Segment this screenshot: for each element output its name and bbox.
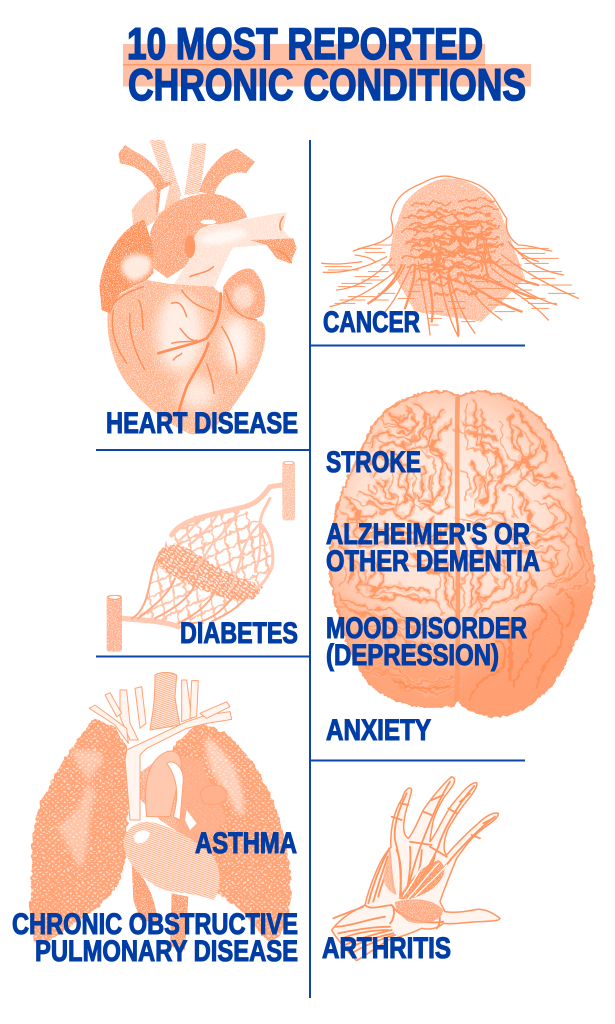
label: stroke: STROKE xyxy=(326,446,421,479)
label: diabetes: DIABETES xyxy=(180,617,298,650)
label: mood disorder (depression): MOOD DISORDER xyxy=(326,612,527,645)
lungs light lobes xyxy=(57,737,244,868)
tumor strands xyxy=(368,258,538,335)
title highlight bars xyxy=(123,44,531,86)
hand outline xyxy=(332,777,500,961)
capillary tube right xyxy=(282,461,295,520)
hand tendons xyxy=(333,782,495,953)
tumor dome fill xyxy=(388,178,525,322)
lungs heart xyxy=(123,810,220,900)
label: chronic obstructive pulmonary disease: CHRONIC OBSTRUCTIVE xyxy=(12,908,298,941)
illustration: tumor xyxy=(322,176,578,337)
label: arthritis: ARTHRITIS xyxy=(322,932,451,965)
title line 1: 10 MOST REPORTED xyxy=(127,20,483,69)
lungs vessels xyxy=(89,672,232,820)
title line 2: CHRONIC CONDITIONS xyxy=(128,61,526,110)
tumor squiggles xyxy=(402,198,503,296)
capillary net xyxy=(138,510,274,624)
label: cancer: CANCER xyxy=(323,306,420,339)
capillary tube left xyxy=(107,595,122,652)
label: chronic obstructive pulmonary disease xyxy=(12,908,298,968)
illustration: hand xyxy=(332,777,500,961)
label: alzheimer's or other dementia: OTHER DEMENTIA xyxy=(326,545,540,578)
illustration: heart xyxy=(99,140,297,434)
tumor outline xyxy=(322,176,578,337)
label: mood disorder (depression) xyxy=(326,612,527,672)
brain soft gyri shadow xyxy=(337,400,588,693)
label: mood disorder (depression): (DEPRESSION) xyxy=(326,639,499,672)
title xyxy=(123,20,531,110)
label: alzheimer's or other dementia: ALZHEIMER'S OR xyxy=(326,518,530,551)
illustration: capillaries xyxy=(107,461,295,652)
divider lines xyxy=(96,140,525,998)
label: asthma: ASTHMA xyxy=(195,827,297,860)
label: alzheimer's or other dementia xyxy=(326,518,540,578)
illustration: brain xyxy=(328,391,603,723)
lungs tissue xyxy=(30,718,291,945)
illustration: lungs xyxy=(30,672,291,950)
capillary mesh band xyxy=(158,544,263,601)
brain lower folds xyxy=(393,593,573,700)
label: anxiety: ANXIETY xyxy=(326,714,431,747)
heart highlights xyxy=(121,220,254,410)
brain silhouette xyxy=(331,391,594,716)
brain central fissure xyxy=(457,397,458,702)
hand muscle mass xyxy=(398,860,444,899)
brain lower shading xyxy=(357,484,594,716)
brain shading and gyri xyxy=(328,400,603,723)
capillary branches xyxy=(122,485,282,627)
brain gyri lines xyxy=(328,400,588,693)
heart arteries xyxy=(112,217,291,413)
label: chronic obstructive pulmonary disease: PULMONARY DISEASE xyxy=(35,935,298,968)
label: heart disease: HEART DISEASE xyxy=(106,407,298,440)
tumor hatching rays xyxy=(325,245,575,325)
